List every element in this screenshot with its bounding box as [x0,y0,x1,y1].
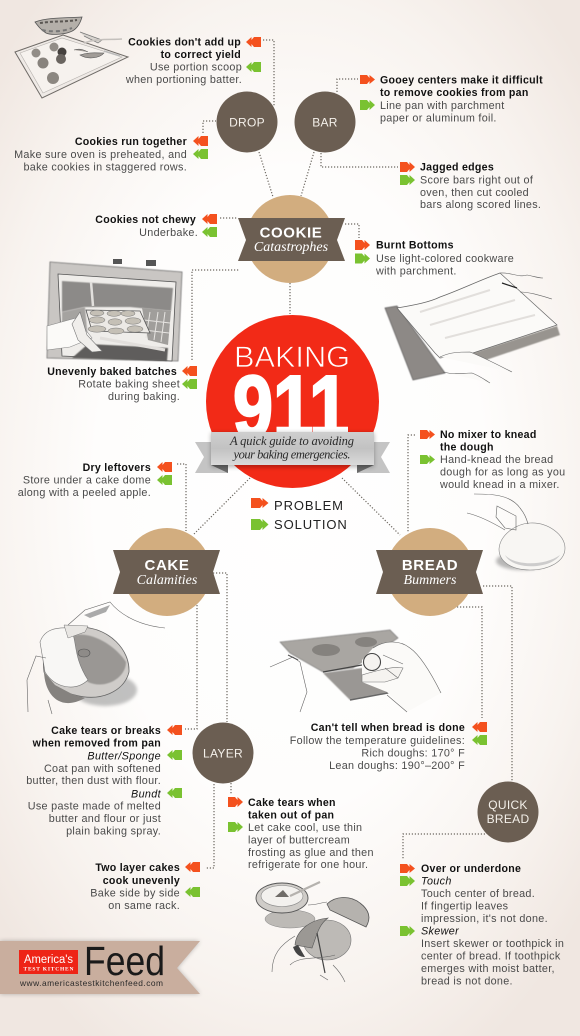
ribbon: subtitle [195,432,390,473]
icon and text: dry leftovers: Dry leftovers [83,462,151,474]
icon and text: no mixer [420,429,565,491]
icon and text: cake tears or breaks: butter and flour or just [49,813,161,825]
icon and text: cake tears when taken out of pan: Cake tears when [248,797,336,809]
circle: layer: LAYER [203,746,243,760]
badge: cake calamities: CAKE [145,557,189,574]
icon and text: cake tears when taken out of pan: refrigerate for one hour. [248,859,368,871]
circle: quick bread: BREAD [487,812,529,826]
illustration: thermometer in bread loaf [270,630,441,712]
legend: problem and solution [251,498,348,532]
icon and text: burnt bottoms: Burnt Bottoms [376,240,454,252]
icon and text: dry leftovers [18,462,172,499]
footer logo banner [0,938,200,994]
icon and text: cake tears or breaks: plain baking spray. [66,826,161,838]
icon and text: no mixer: dough for as long as you [440,466,565,478]
badge: cake calamities [113,528,220,616]
icon and text: cake tears when taken out of pan [228,797,374,871]
icon and text: cookies run together: Cookies run together [75,136,187,148]
circle: quick bread [478,782,538,842]
badge: cookie catastrophes: COOKIE [260,224,322,242]
icon and text: cake tears when taken out of pan: Let cake cool, use thin [248,822,362,834]
badge: bread bummers: Bummers [404,573,457,588]
icon and text: two layer cakes: Two layer cakes [95,862,180,874]
icon and text: can't tell when bread is done: Follow the temperature guidelines: [290,735,465,747]
footer logo banner: TEST KITCHEN [24,966,74,972]
icon and text: cookies don't add up: when portioning batter. [125,74,242,86]
footer logo banner: www.americastestkitchenfeed.com [19,978,163,988]
footer logo banner: America's [24,954,73,966]
icon and text: cake tears or breaks: Butter/Sponge [87,750,161,762]
icon and text: gooey centers: paper or aluminum foil. [380,112,497,124]
icon and text: cookies don't add up: Cookies don't add up [128,36,241,48]
icon and text: over or underdone: bread is not done. [421,976,513,988]
icon and text: unevenly baked batches [47,366,197,403]
icon and text: cookies run together [14,136,208,174]
icon and text: cake tears or breaks: butter, then dust with flour. [26,775,161,787]
icon and text: cake tears or breaks: Use paste made of melted [28,800,161,812]
legend: problem and solution: PROBLEM [274,498,344,513]
icon and text: unevenly baked batches: Rotate baking sheet [78,378,180,390]
icon and text: over or underdone: Touch [421,876,452,888]
footer logo banner: Feed [84,938,165,984]
icon and text: no mixer: Hand-knead the bread [440,454,553,466]
icon and text: cookies run together: bake cookies in staggered rows. [23,162,187,174]
icon and text: unevenly baked batches: Unevenly baked batches [47,366,177,378]
circle: bar: BAR [312,116,338,130]
icon and text: cake tears or breaks: when removed from pan [32,738,161,750]
icon and text: cookies not chewy: Cookies not chewy [95,214,196,226]
icon and text: no mixer: would knead in a mixer. [439,479,560,491]
icon and text: burnt bottoms [355,240,514,278]
badge: cookie catastrophes [238,195,345,283]
illustration: bowl, frosting and cake layers [256,882,369,982]
icon and text: can't tell when bread is done [290,722,487,772]
legend: problem and solution: SOLUTION [274,517,348,532]
icon and text: gooey centers: Gooey centers make it difficult [380,74,543,86]
circle: layer [192,722,254,784]
icon and text: gooey centers: Line pan with parchment [380,100,505,112]
icon and text: no mixer: the dough [440,442,494,454]
ribbon: subtitle: A quick guide to avoiding [229,434,354,448]
icon and text: no mixer: No mixer to knead [440,429,537,441]
icon and text: over or underdone: impression, it's not done. [421,913,548,925]
icon and text: cookies don't add up: Use portion scoop [150,62,242,74]
badge: cookie catastrophes: Catastrophes [254,240,329,255]
icon and text: jagged edges: bars along scored lines. [420,199,541,211]
illustration: cookie tray with scoop [15,17,128,98]
icon and text: two layer cakes: on same rack. [108,900,180,912]
icon and text: cookies not chewy: Underbake. [139,227,198,239]
icon and text: jagged edges: Jagged edges [420,162,494,174]
circle: quick bread: QUICK [488,798,528,812]
icon and text: cookies don't add up [125,36,261,86]
icon and text: burnt bottoms: with parchment. [375,266,457,278]
icon and text: cookies run together: Make sure oven is preheated, and [14,149,187,161]
icon and text: cake tears or breaks: Cake tears or breaks [51,725,161,737]
circle: drop [216,92,278,152]
title: baking 911 [206,315,379,488]
icon and text: burnt bottoms: Use light-colored cookware [376,253,514,265]
icon and text: jagged edges: Score bars right out of [420,174,534,186]
icon and text: over or underdone: If fingertip leaves [421,900,509,912]
icon and text: over or underdone: Insert skewer or toothpick in [421,938,564,950]
illustration: oven with baking tray [47,259,182,361]
icon and text: cake tears or breaks: Coat pan with softened [44,763,161,775]
icon and text: over or underdone [400,863,564,988]
illustration: parchment lined pan [385,273,560,383]
ribbon: subtitle: your baking emergencies. [232,448,350,462]
icon and text: jagged edges: oven, then cut cooled [420,187,529,199]
badge: bread bummers: BREAD [402,557,458,574]
icon and text: cake tears when taken out of pan: taken out of pan [248,810,334,822]
icon and text: jagged edges [400,162,541,211]
icon and text: unevenly baked batches: during baking. [108,391,180,403]
icon and text: can't tell when bread is done: Lean doughs: 190°–200° F [329,760,465,772]
icon and text: cookies don't add up: to correct yield [161,49,241,61]
icon and text: over or underdone: center of bread. If toothpick [421,950,561,962]
title: baking 911: BAKING [234,341,350,374]
icon and text: gooey centers: to remove cookies from pan [380,87,529,99]
icon and text: over or underdone: Skewer [421,926,459,938]
icon and text: two layer cakes: Bake side by side [90,888,180,900]
illustration: bundt pan and hand [27,602,165,714]
icon and text: over or underdone: Over or underdone [421,863,521,875]
title: baking 911: 911 [233,357,349,456]
icon and text: dry leftovers: Store under a cake dome [23,474,151,486]
icon and text: dry leftovers: along with a peeled apple. [18,487,151,499]
icon and text: cake tears when taken out of pan: frosting as glue and then [248,847,374,859]
icon and text: can't tell when bread is done: Rich doughs: 170° F [361,748,465,760]
icon and text: over or underdone: emerges with moist batter, [421,963,555,975]
circle: bar [294,92,356,152]
icon and text: two layer cakes: cook unevenly [103,875,180,887]
icon and text: cake tears or breaks: Bundt [131,788,162,800]
icon and text: cookies not chewy [95,214,217,239]
illustration: dough ball with hand [467,494,565,570]
icon and text: cake tears or breaks [26,725,182,838]
icon and text: can't tell when bread is done: Can't tell when bread is done [311,722,465,734]
icon and text: gooey centers [360,74,543,124]
icon and text: over or underdone: Touch center of bread. [421,888,535,900]
circle: drop: DROP [229,116,265,130]
badge: bread bummers [376,528,483,616]
icon and text: cake tears when taken out of pan: layer of buttercream [248,834,350,846]
badge: cake calamities: Calamities [137,573,198,588]
icon and text: two layer cakes [90,862,200,912]
